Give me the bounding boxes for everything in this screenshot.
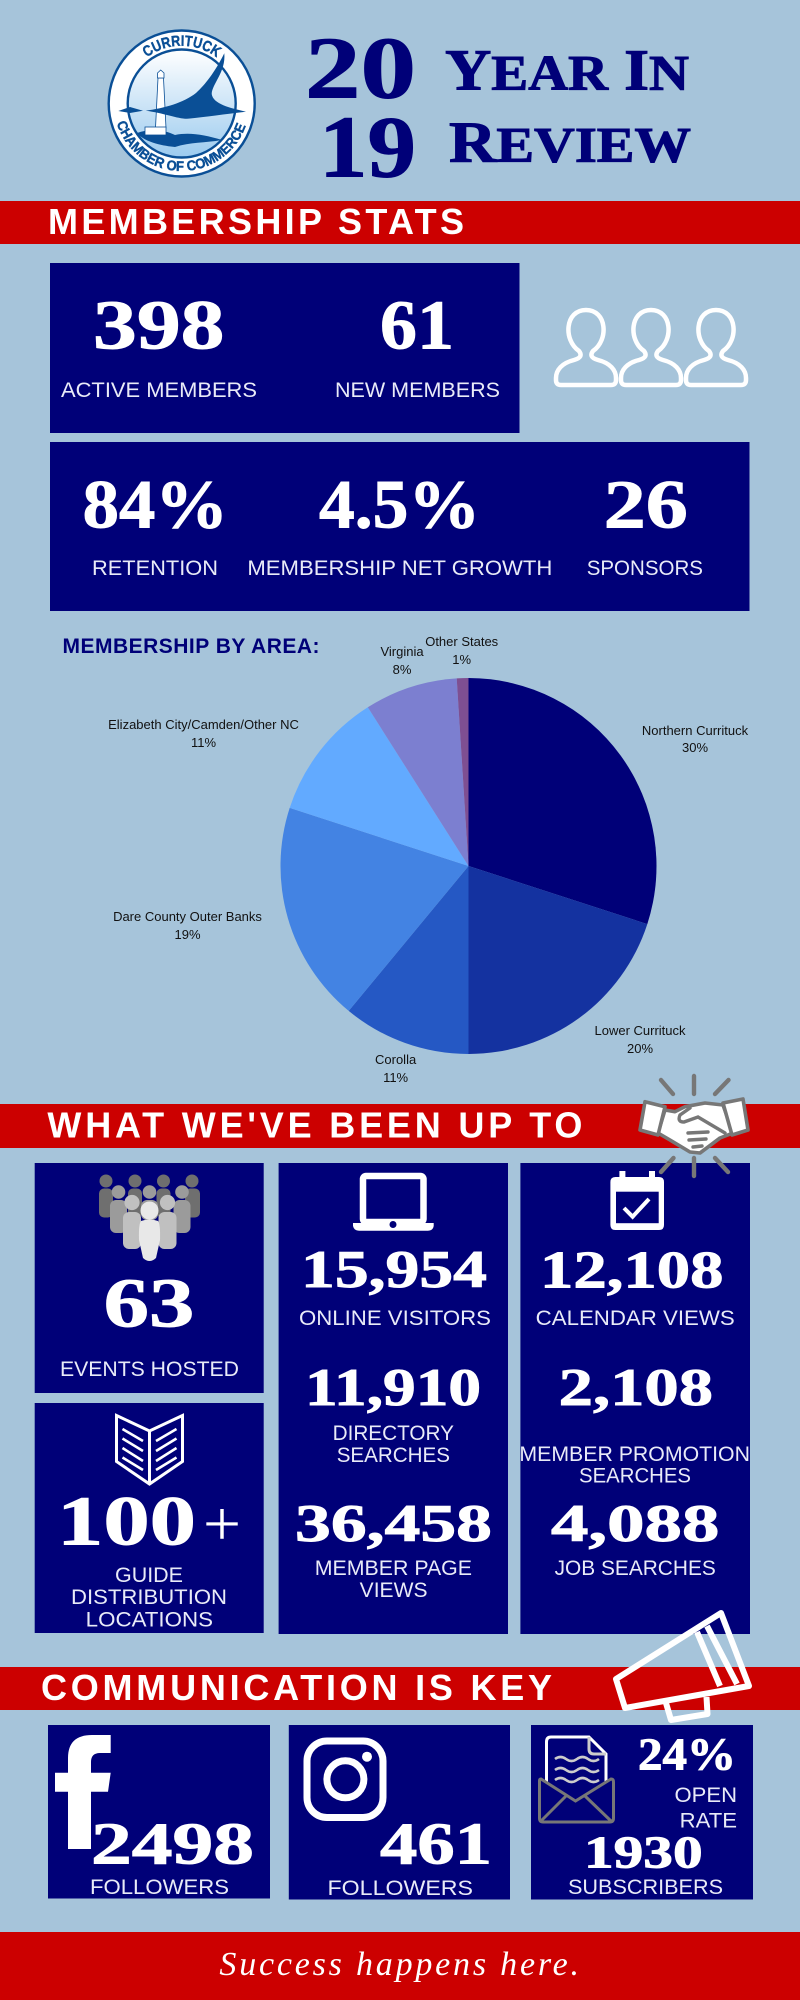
logo: Currituck Chamber of Commerce: CHAMBER OF COMMERCE: [118, 121, 246, 172]
icon: handshake with rays: [640, 1076, 748, 1176]
stat: directory searches: DIRECTORY: [333, 1422, 454, 1445]
stat: job searches: [551, 1495, 719, 1580]
stat: 100+ guide distribution locations: DISTRIBUTION: [71, 1586, 227, 1609]
title: 2019 year: [305, 20, 416, 196]
stat: open rate: RATE: [680, 1810, 737, 1833]
stat: job searches: JOB SEARCHES: [555, 1557, 716, 1580]
icon: instagram: [307, 1741, 383, 1818]
stat: events hosted: 63: [104, 1266, 194, 1342]
stat: subscribers: 1930: [584, 1828, 703, 1878]
panel: events hosted: [35, 1163, 264, 1393]
label: Dare County Outer Banks: [113, 909, 262, 942]
panel: facebook: [48, 1725, 270, 1899]
stat: sponsors: 26: [604, 466, 688, 542]
title: Year In Review: YEAR IN: [445, 38, 689, 102]
banner: communication is key: [0, 1667, 800, 1710]
label: Other States: 1%: [452, 652, 472, 667]
label: Dare County Outer Banks: 19%: [174, 927, 201, 942]
stat: events hosted: [60, 1266, 239, 1381]
stat: retention: 84%: [83, 466, 228, 542]
stat: facebook followers: 2498: [91, 1810, 254, 1876]
label: Corolla: Corolla: [375, 1052, 417, 1067]
stat: 100+ guide distribution locations: [57, 1484, 241, 1632]
stat: events hosted: EVENTS HOSTED: [60, 1358, 239, 1381]
label: Virginia: [380, 644, 424, 677]
icon: calendar: [610, 1171, 664, 1230]
stat: open rate: OPEN: [674, 1784, 737, 1807]
stat: retention: [83, 466, 228, 580]
stat: member page views: [295, 1495, 492, 1602]
stat: member promotion searches: MEMBER PROMOTION: [519, 1443, 750, 1466]
stat: member promotion searches: 2,108: [559, 1359, 713, 1417]
icon: open book: [116, 1416, 182, 1484]
stat: instagram followers: 461: [380, 1810, 492, 1876]
label: Lower Currituck: [594, 1023, 686, 1056]
label: Northern Currituck: 30%: [682, 740, 708, 755]
stat: sponsors: [587, 466, 703, 580]
stat: membership net growth: 4.5%: [319, 466, 480, 542]
label: Dare County Outer Banks: Dare County Outer Banks: [113, 909, 262, 924]
stat: online visitors: 15,954: [301, 1241, 487, 1299]
label: Corolla: 11%: [383, 1070, 409, 1085]
label: Virginia: Virginia: [380, 644, 424, 659]
stat: directory searches: [305, 1359, 481, 1467]
stat: active members: 398: [93, 288, 224, 364]
stat: facebook followers: FOLLOWERS: [90, 1876, 229, 1899]
label: Other States: Other States: [425, 634, 499, 649]
stat: job searches: 4,088: [551, 1495, 719, 1553]
footer banner: tagline: [0, 1932, 800, 2000]
label: Other States: [425, 634, 499, 667]
stat: member promotion searches: SEARCHES: [579, 1465, 691, 1488]
pie chart: membership by area: [108, 634, 749, 1085]
logo: Currituck Chamber of Commerce: CURRITUCK: [142, 35, 222, 58]
stat: facebook followers: [90, 1810, 254, 1899]
stat: membership net growth: MEMBERSHIP NET GROWTH: [247, 557, 552, 580]
stat: membership net growth: [247, 466, 552, 580]
banner: what we've been up to: WHAT WE'VE BEEN UP TO: [47, 1104, 582, 1146]
panel: guide distribution: [35, 1403, 264, 1633]
label: Elizabeth City/Camden/Other NC: [108, 717, 299, 750]
label: Northern Currituck: [642, 723, 749, 755]
stat: instagram followers: FOLLOWERS: [328, 1877, 473, 1900]
banner: membership stats: [0, 201, 800, 244]
icon: three member outlines: [556, 310, 746, 385]
stat: member page views: VIEWS: [360, 1579, 428, 1602]
stat: calendar views: CALENDAR VIEWS: [536, 1307, 735, 1330]
stat: member promotion searches: [519, 1359, 750, 1488]
icon: laptop: [353, 1176, 434, 1231]
panel: instagram: [289, 1725, 510, 1900]
icon: crowd of people: [99, 1174, 200, 1261]
icon: megaphone: [616, 1613, 749, 1720]
logo: Currituck Chamber of Commerce: [108, 29, 256, 178]
stat: new members: [335, 288, 500, 402]
panel: listings and promotions: [519, 1163, 750, 1634]
banner: what we've been up to: [0, 1104, 800, 1148]
stat: subscribers: SUBSCRIBERS: [568, 1876, 723, 1899]
stat: calendar views: [536, 1242, 735, 1330]
stat: sponsors: SPONSORS: [587, 557, 703, 580]
stat: 100+ guide distribution locations: 100: [57, 1484, 196, 1560]
title: 2019 year: 19: [319, 100, 416, 196]
label: Elizabeth City/Camden/Other NC: Elizabeth City/Camden/Other NC: [108, 717, 299, 732]
label: Elizabeth City/Camden/Other NC: 11%: [191, 735, 216, 750]
stat: subscribers: [568, 1828, 723, 1899]
panel: email: [531, 1725, 753, 1900]
stat: retention: RETENTION: [92, 557, 218, 580]
stat: active members: [61, 288, 257, 402]
icon: facebook f: [55, 1735, 111, 1849]
panel: member counts: [50, 263, 520, 433]
stat: 100+ guide distribution locations: GUIDE: [115, 1564, 183, 1587]
stat: directory searches: 11,910: [305, 1359, 481, 1417]
stat: member page views: MEMBER PAGE: [315, 1557, 472, 1580]
stat: online visitors: ONLINE VISITORS: [299, 1307, 491, 1330]
stat: online visitors: [299, 1241, 491, 1330]
label: Corolla: [375, 1052, 417, 1085]
title: 2019 year: 20: [305, 20, 416, 118]
icon: email envelope and letter: [540, 1737, 614, 1822]
stat: 100+ guide distribution locations: LOCATIONS: [86, 1609, 213, 1632]
label: Virginia: 8%: [393, 662, 412, 677]
stat: open rate: 24%: [638, 1730, 736, 1780]
panel: retention, growth, sponsors: [50, 442, 750, 611]
stat: directory searches: SEARCHES: [337, 1444, 450, 1467]
title: Year In Review: [445, 38, 691, 174]
stat: new members: 61: [380, 288, 454, 364]
title: Year In Review: REVIEW: [449, 110, 691, 174]
label: Lower Currituck: 20%: [627, 1041, 653, 1056]
label: Northern Currituck: Northern Currituck: [642, 723, 749, 738]
stat: new members: NEW MEMBERS: [335, 379, 500, 402]
footer banner: tagline: Success happens here.: [219, 1946, 579, 1983]
stat: instagram followers: [328, 1810, 492, 1900]
stat: 100+ guide distribution locations: +: [203, 1488, 241, 1559]
banner: communication is key: COMMUNICATION IS KEY: [41, 1667, 552, 1708]
label: Lower Currituck: Lower Currituck: [594, 1023, 686, 1038]
banner: membership stats: MEMBERSHIP STATS: [48, 201, 464, 242]
stat: member page views: 36,458: [295, 1495, 492, 1553]
stat: open rate: [638, 1730, 737, 1833]
panel: web traffic: [279, 1163, 508, 1634]
stat: active members: ACTIVE MEMBERS: [61, 379, 257, 402]
stat: calendar views: 12,108: [540, 1242, 724, 1300]
heading: membership by area: MEMBERSHIP BY AREA:: [62, 635, 320, 658]
